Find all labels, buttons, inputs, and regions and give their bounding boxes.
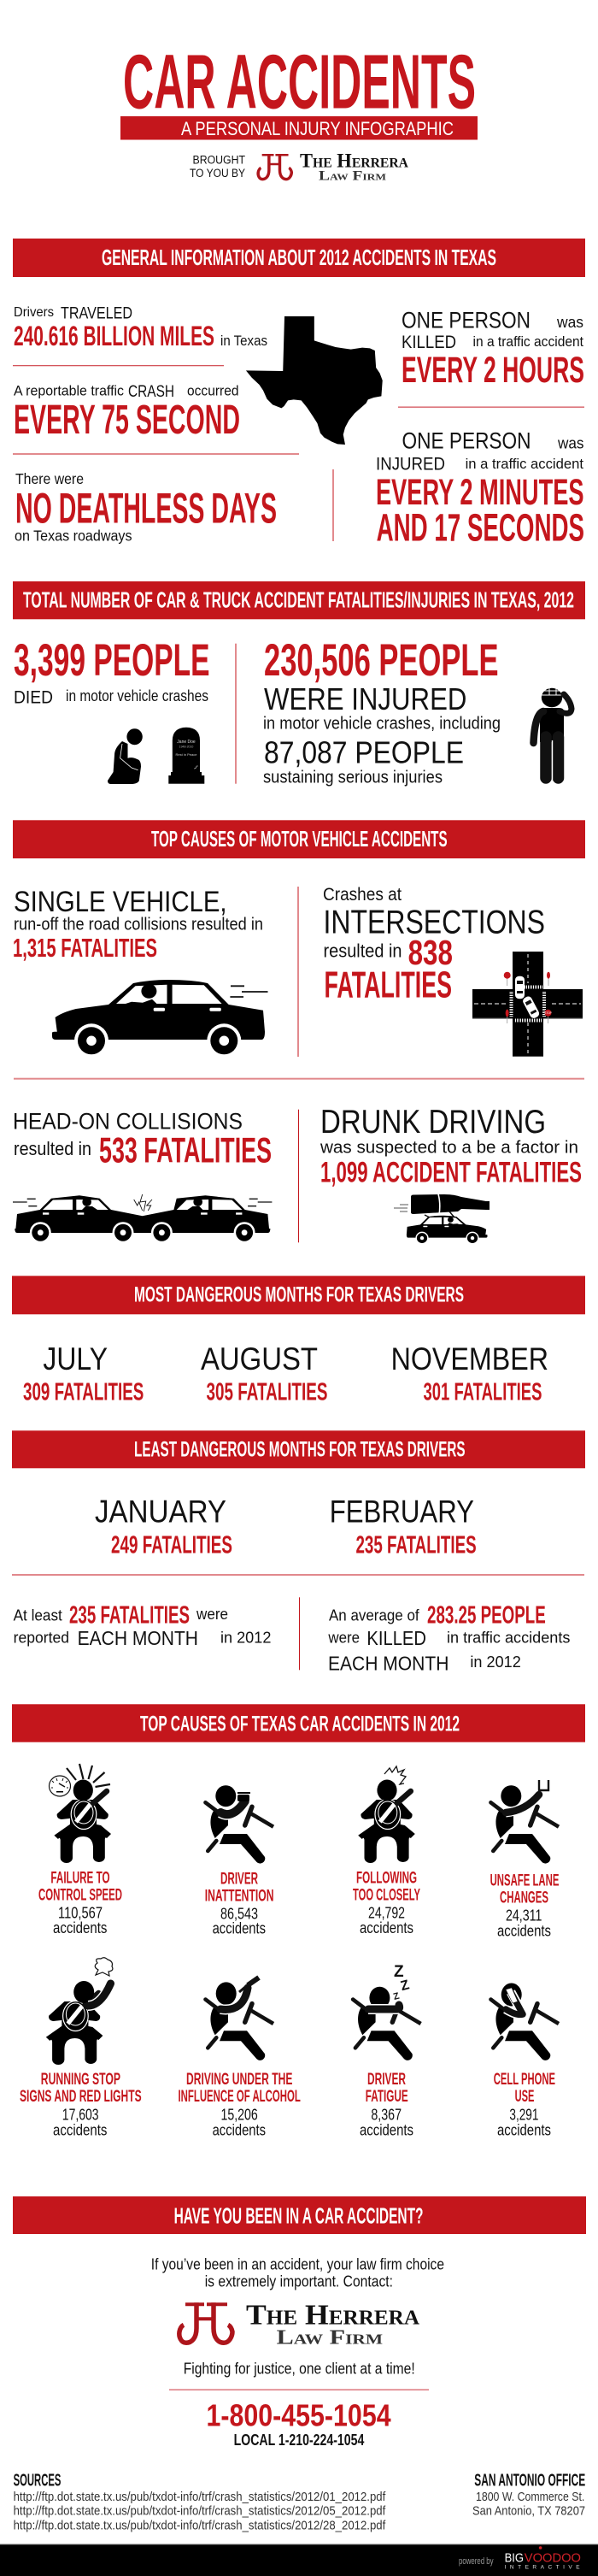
stat: crash frequency: occurred bbox=[187, 383, 239, 399]
text: failure to control speed: FAILURE TO bbox=[50, 1868, 110, 1887]
text: driver inattention: accidents bbox=[213, 1920, 266, 1937]
text: sources bbox=[14, 2471, 386, 2533]
icon: intersection crash bbox=[472, 952, 583, 1057]
stat: people killed each month: EACH MONTH bbox=[328, 1652, 448, 1674]
icon: intersection crash: STOP bbox=[544, 1011, 552, 1015]
stat: July: JULY bbox=[43, 1341, 108, 1376]
icon: following too closely bbox=[358, 1766, 415, 1863]
footer bar bbox=[0, 2544, 598, 2576]
text: following too closely: accidents bbox=[360, 1919, 413, 1936]
text: San Antonio office bbox=[472, 2471, 585, 2519]
stat: people killed each month: were bbox=[327, 1630, 360, 1647]
logo: Herrera large: Law Firm bbox=[277, 2327, 383, 2349]
text: cell phone use: CELL PHONE bbox=[494, 2070, 555, 2089]
stat: crash frequency: A reportable traffic bbox=[14, 383, 124, 399]
text: cell phone use: USE bbox=[515, 2087, 534, 2106]
stat: no deathless days: NO DEATHLESS DAYS bbox=[15, 484, 277, 532]
logo: Herrera small: Law Firm bbox=[319, 168, 387, 183]
stat: January: 249 FATALITIES bbox=[111, 1532, 232, 1559]
text: driver inattention bbox=[205, 1869, 273, 1937]
stat: head-on collisions: resulted in bbox=[14, 1138, 91, 1159]
stat: people died: 3,399 PEOPLE bbox=[14, 635, 209, 686]
stat: head-on collisions: HEAD-ON COLLISIONS bbox=[13, 1109, 243, 1135]
icon: unsafe lane changes bbox=[490, 1780, 559, 1864]
stat: crash frequency: CRASH bbox=[128, 382, 174, 401]
stat: people killed each month: in traffic accidents bbox=[447, 1630, 570, 1647]
icon: driver fatigue: Z bbox=[392, 1991, 401, 2002]
icon: gravestone: Jane Doe bbox=[177, 740, 196, 745]
section heading: most dangerous months bbox=[12, 1276, 585, 1314]
section heading: top causes of Texas car accidents bbox=[12, 1704, 585, 1742]
icon: Texas map bbox=[246, 316, 383, 445]
stat: July bbox=[23, 1341, 144, 1406]
section heading: have you been in a car accident: HAVE YOU BEEN IN A CAR ACCIDENT? bbox=[174, 2203, 424, 2229]
section heading: top causes of motor vehicle accidents bbox=[13, 820, 585, 858]
icon: gravestone bbox=[168, 728, 204, 784]
text: following too closely: 24,792 bbox=[368, 1904, 405, 1921]
text: cell phone use: 3,291 bbox=[509, 2106, 538, 2123]
text: driver fatigue bbox=[360, 2070, 413, 2138]
stat: head-on collisions: 533 FATALITIES bbox=[99, 1129, 272, 1170]
text: driving under the influence: INFLUENCE OF ALCOHOL bbox=[178, 2087, 301, 2106]
icon: gravestone: 1948-2010 bbox=[179, 745, 193, 748]
stat: one person injured: in a traffic accident bbox=[466, 456, 583, 472]
stat: people injured bbox=[263, 635, 501, 787]
stat: fatalities each month: reported bbox=[14, 1630, 69, 1647]
stat: no deathless days bbox=[15, 470, 277, 545]
text: driver fatigue: 8,367 bbox=[371, 2106, 402, 2123]
footer bar: VOODOO bbox=[525, 2552, 581, 2566]
text: contact intro: If you’ve been in an accident, your law firm choice bbox=[151, 2255, 444, 2272]
icon: running stop signs bbox=[46, 1958, 113, 2065]
text: driving under the influence: DRIVING UNDER THE bbox=[186, 2070, 292, 2089]
stat: single vehicle bbox=[13, 886, 263, 963]
stat: January: JANUARY bbox=[95, 1494, 226, 1530]
brought to you by: TO YOU BY bbox=[190, 167, 245, 180]
text: running stop signs: 17,603 bbox=[62, 2106, 99, 2123]
stat: no deathless days: on Texas roadways bbox=[15, 528, 132, 545]
stat: people killed each month: An average of bbox=[329, 1606, 420, 1624]
text: unsafe lane changes: CHANGES bbox=[500, 1889, 548, 1907]
stat: one person killed bbox=[402, 307, 584, 391]
text: driving under the influence: accidents bbox=[213, 2121, 266, 2138]
stat: one person killed: ONE PERSON bbox=[402, 307, 531, 333]
stat: July: 309 FATALITIES bbox=[23, 1378, 144, 1406]
text: failure to control speed: 110,567 bbox=[58, 1904, 103, 1921]
stat: intersections bbox=[323, 885, 545, 1006]
text: cell phone use: accidents bbox=[497, 2121, 551, 2138]
stat: people killed each month: in 2012 bbox=[470, 1653, 521, 1671]
stat: intersections: 838 bbox=[408, 933, 453, 972]
stat: November bbox=[391, 1341, 548, 1406]
stat: single vehicle: run-off the road collisions resulted in bbox=[14, 915, 263, 934]
text: unsafe lane changes bbox=[490, 1872, 559, 1939]
text: running stop signs: SIGNS AND RED LIGHTS bbox=[20, 2087, 142, 2106]
text: failure to control speed: accidents bbox=[53, 1919, 107, 1936]
stat: August: 305 FATALITIES bbox=[207, 1378, 328, 1406]
stat: fatalities each month: in 2012 bbox=[220, 1630, 271, 1647]
icon: driver inattention bbox=[205, 1785, 273, 1864]
stat: one person injured: was bbox=[557, 435, 584, 452]
stat: February: FEBRUARY bbox=[330, 1494, 474, 1530]
stat: people died bbox=[14, 635, 209, 708]
logo: Herrera large bbox=[179, 2299, 420, 2349]
stat: intersections: FATALITIES bbox=[325, 964, 452, 1006]
text: phone numbers: 1-800-455-1054 bbox=[207, 2397, 391, 2432]
text: unsafe lane changes: accidents bbox=[497, 1922, 551, 1939]
text: sources: http://ftp.dot.state.tx.us/pub/txdot-info/trf/crash_statistics/2012/28_2012.pdf bbox=[14, 2519, 386, 2533]
stat: drunk driving bbox=[320, 1104, 582, 1189]
text: contact intro: is extremely important. Contact: bbox=[205, 2272, 393, 2290]
text: driver inattention: DRIVER bbox=[220, 1869, 258, 1888]
text: phone numbers: LOCAL 1-210-224-1054 bbox=[234, 2431, 365, 2449]
stat: people injured: WERE INJURED bbox=[264, 681, 466, 716]
brought to you by: BROUGHT bbox=[193, 154, 245, 167]
text: sources: SOURCES bbox=[14, 2471, 61, 2490]
icon: failure to control speed bbox=[50, 1764, 111, 1863]
title: A PERSONAL INJURY INFOGRAPHIC bbox=[181, 118, 454, 139]
title bbox=[120, 39, 478, 140]
stat: miles traveled: TRAVELED bbox=[61, 304, 132, 323]
icon: car bbox=[52, 980, 268, 1058]
section heading: total number bbox=[13, 581, 585, 619]
stat: people died: DIED bbox=[14, 688, 53, 708]
stat: intersections: Crashes at bbox=[323, 885, 402, 905]
stat: January bbox=[95, 1494, 232, 1559]
icon: driver fatigue: Z bbox=[399, 1978, 411, 1994]
icon: gravestone: Rest in Peace bbox=[176, 752, 197, 757]
stat: drunk driving: was suspected to a be a factor in bbox=[320, 1139, 578, 1158]
text: driving under the influence bbox=[178, 2070, 301, 2138]
text: running stop signs: accidents bbox=[53, 2121, 107, 2138]
text: driver fatigue: accidents bbox=[360, 2121, 413, 2138]
stat: single vehicle: SINGLE VEHICLE, bbox=[14, 886, 227, 918]
text: driver fatigue: FATIGUE bbox=[366, 2087, 408, 2106]
text: driver fatigue: DRIVER bbox=[367, 2070, 406, 2089]
stat: August: AUGUST bbox=[201, 1341, 318, 1376]
logo: Herrera small: The Herrera bbox=[300, 150, 408, 172]
stat: fatalities each month: were bbox=[196, 1606, 228, 1623]
section heading: general information bbox=[13, 239, 585, 277]
text: running stop signs: RUNNING STOP bbox=[41, 2070, 120, 2089]
text: following too closely: FOLLOWING bbox=[356, 1868, 417, 1887]
stat: February bbox=[330, 1494, 477, 1559]
text: contact intro bbox=[151, 2255, 444, 2290]
stat: miles traveled: 240.616 BILLION MILES bbox=[14, 321, 214, 351]
stat: no deathless days: There were bbox=[15, 470, 84, 487]
text: following too closely bbox=[353, 1868, 420, 1936]
stat: drunk driving: DRUNK DRIVING bbox=[320, 1104, 546, 1141]
icon: cell phone use bbox=[490, 1984, 559, 2060]
icon: kneeling mourner bbox=[108, 728, 143, 784]
text: unsafe lane changes: 24,311 bbox=[506, 1907, 542, 1925]
stat: people killed each month: KILLED bbox=[366, 1627, 426, 1649]
stat: February: 235 FATALITIES bbox=[355, 1532, 477, 1559]
text: failure to control speed bbox=[38, 1868, 122, 1936]
stat: fatalities each month: At least bbox=[14, 1606, 62, 1624]
icon: injured man bbox=[533, 688, 572, 780]
stat: crash frequency bbox=[14, 382, 240, 443]
text: phone numbers bbox=[207, 2397, 391, 2449]
stat: miles traveled: Drivers bbox=[14, 305, 54, 320]
icon: driver fatigue bbox=[353, 1963, 421, 2060]
text: driving under the influence: 15,206 bbox=[220, 2106, 258, 2123]
stat: intersections: resulted in bbox=[323, 940, 402, 961]
brought to you by bbox=[190, 154, 245, 180]
stat: one person injured: INJURED bbox=[376, 454, 445, 474]
stat: August bbox=[201, 1341, 328, 1406]
text: cell phone use bbox=[494, 2070, 555, 2138]
stat: fatalities each month: 235 FATALITIES bbox=[69, 1602, 190, 1630]
stat: intersections: INTERSECTIONS bbox=[323, 905, 545, 941]
stat: miles traveled bbox=[14, 304, 267, 351]
stat: fatalities each month: EACH MONTH bbox=[78, 1627, 198, 1649]
stat: one person killed: in a traffic accident bbox=[473, 333, 583, 350]
icon: car with bottle bbox=[394, 1194, 490, 1244]
stat: people injured: 87,087 PEOPLE bbox=[264, 735, 464, 770]
stat: one person killed: was bbox=[556, 314, 583, 331]
text: running stop signs bbox=[20, 2070, 142, 2138]
stat: single vehicle: 1,315 FATALITIES bbox=[13, 933, 157, 963]
stat: crash frequency: EVERY 75 SECOND bbox=[14, 398, 240, 443]
icon: head-on cars bbox=[13, 1194, 272, 1243]
icon: driver fatigue: Z bbox=[394, 1963, 404, 1981]
stat: head-on collisions bbox=[13, 1109, 272, 1170]
stat: one person injured: ONE PERSON bbox=[402, 428, 531, 454]
stat: one person killed: KILLED bbox=[402, 333, 456, 352]
text: driver inattention: 86,543 bbox=[220, 1905, 258, 1922]
stat: November: NOVEMBER bbox=[391, 1341, 548, 1376]
section heading: least dangerous months bbox=[12, 1430, 585, 1468]
stat: people injured: in motor vehicle crashes, including bbox=[263, 715, 501, 734]
icon: driving under the influence bbox=[205, 1978, 273, 2060]
text: failure to control speed: CONTROL SPEED bbox=[38, 1885, 122, 1904]
stat: one person injured bbox=[376, 428, 584, 549]
section heading: have you been in a car accident bbox=[13, 2196, 586, 2234]
stat: people died: in motor vehicle crashes bbox=[66, 687, 208, 704]
stat: people killed each month bbox=[327, 1602, 570, 1674]
stat: people injured: sustaining serious injuries bbox=[263, 769, 443, 787]
footer bar: powered by bbox=[459, 2556, 494, 2567]
footer bar: BIG bbox=[505, 2552, 524, 2566]
stat: fatalities each month bbox=[14, 1602, 271, 1649]
text: following too closely: TOO CLOSELY bbox=[353, 1885, 420, 1904]
stat: miles traveled: in Texas bbox=[220, 333, 267, 349]
text: driver inattention: INATTENTION bbox=[205, 1886, 273, 1905]
text: tagline: Fighting for justice, one client at a time! bbox=[184, 2360, 415, 2378]
text: sources: http://ftp.dot.state.tx.us/pub/txdot-info/trf/crash_statistics/2012/01_2012.pdf bbox=[14, 2490, 386, 2504]
logo: Herrera large: The Herrera bbox=[246, 2299, 420, 2331]
footer bar: INTERACTIVE bbox=[505, 2565, 580, 2571]
logo: Herrera small bbox=[258, 150, 408, 183]
text: sources: http://ftp.dot.state.tx.us/pub/txdot-info/trf/crash_statistics/2012/05_2012.pdf bbox=[14, 2504, 386, 2519]
